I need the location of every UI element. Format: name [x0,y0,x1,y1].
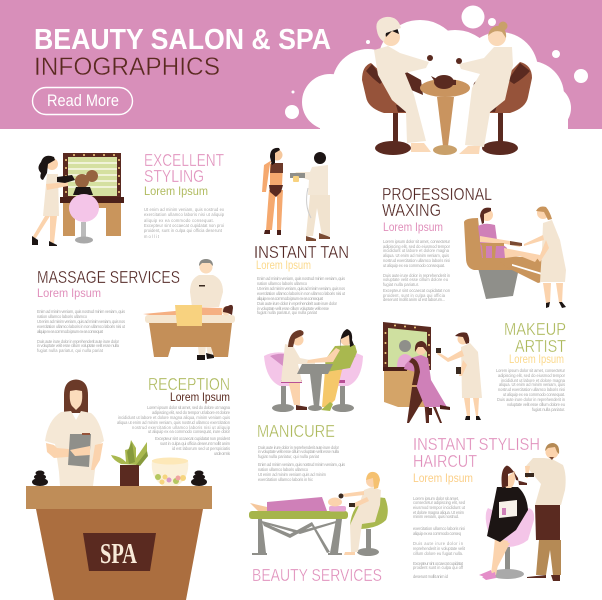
text block: instant stylish haircut: cillum dolore eu fugiat nulla. [413,551,463,556]
text block: makeup artist: Lorem ipsum dolor sit amet, consectetur [496,368,566,373]
illustration: beauty services [249,472,388,556]
subheading: Lorem Ipsum [509,352,564,366]
text block: professional waxing: adipiscing elit, sed do eiusmod tempor [383,244,451,249]
text block: instant stylish haircut: eiusmod tempor incididunt ut [413,505,466,510]
reception desk [26,486,212,600]
text block: professional waxing: Excepteur sint occaecat cupidatat non [383,288,451,293]
text block: reception: incididunt ut labore et dolore magna aliqua, minim veniam quis [118,415,230,420]
text block: massage services: aliquip ex ea commodo ipsum ex ea consequat [37,329,104,334]
illustration: hair styling [32,153,124,246]
heading: makeup artist [504,319,566,356]
heading: instant stylish haircut: HAIRCUT [413,451,477,471]
text block: makeup artist: ut aliquip ex ea commodo consequat. [503,392,565,397]
text block: instant stylish haircut: reprehenderit in voluptate velit [413,546,466,551]
subheading: Lorem Ipsum [383,220,443,234]
text block: reception: ut aliquip ex ea commodo consequat, irure dolor [148,429,231,434]
heading: beauty services: BEAUTY SERVICES [252,565,382,585]
text block: instant tan: nation ullamco laboris ullamco [257,281,308,286]
heading: instant stylish haircut: INSTANT STYLISH [413,434,540,454]
text block: professional waxing: proident, sunt in culpa qui officia [383,293,446,298]
text block: professional waxing: deserunt mollit anim id est laborum... [383,297,445,302]
text block: makeup artist: voluptate velit esse cillum dolore eu [507,402,565,407]
text block: massage services: fugiat nulla pariatur, qui nulla pariat [37,348,104,353]
illustration: waxing [464,206,566,308]
heading: reception: RECEPTION [148,374,230,394]
text block: instant stylish haircut: consectetur adipiscing elit, sed [413,500,466,505]
text block: instant stylish haircut [413,496,466,579]
text block: instant stylish haircut: Excepteur sint occaecat cupidatat [413,561,464,566]
text block: manicure [258,445,345,482]
text block: instant stylish haircut: Lorem ipsum dolor sit amet, [413,496,459,501]
subheading: Lorem Ipsum [256,258,311,272]
text block: instant tan: Duis aute irure dolor in reprehenderit aute irure dolor [257,301,338,306]
text block: professional waxing: fugiat nulla pariatur. [383,282,419,287]
text block: manicure: nation ullamco laboris ullamco [258,467,309,472]
icon: stones left [32,470,48,486]
text block: instant tan: in voluptate velit esse cillum voluptate velit esse [257,306,330,311]
text block: reception: id est laborum sed ut perspiciatis [172,446,230,451]
text block: excellent styling: Excepteur sint occaecat cupidatat non proi [144,223,224,228]
text block: manicure: Enim ad minim veniam, quis nostrud minim veniam, quis [258,462,345,467]
text block: makeup artist [496,368,566,412]
illustration: manicure [264,329,363,412]
subheading: Lorem Ipsum [37,286,101,300]
text block: excellent styling [144,207,225,239]
text block: excellent styling: proident, sunt in culpa qui officia deserunt [144,228,223,233]
heading: excellent styling [144,150,224,186]
heading: excellent styling: EXCELLENT [144,150,224,170]
illustration: tea scene [362,17,532,155]
text block: instant stylish haircut: aliquip ex ea commodo conseq [413,531,462,536]
text block: reception: nostrud exercitation ullamco laboris nisi ut aliquip [132,425,231,430]
illustration: haircut [479,443,566,581]
text block: makeup artist: Duis aute irure dolor in reprehenderit in [497,397,566,402]
header banner [0,0,602,160]
heading: professional waxing: WAXING [382,200,441,220]
text block: reception: unde omnis [214,451,230,456]
text block: massage services: Ut enim ad minim veniam, quis ad minim veniam, quis nos [37,319,125,324]
text block: reception [117,405,231,456]
text block: professional waxing: nostrud exercitation ullamco laboris nisi [383,258,450,263]
text block: massage services: nation ullamco laboris ullamco [37,314,88,319]
heading: makeup artist: ARTIST [515,336,566,356]
text block: manicure: fugiat nulla pariatur, qui nulla pariat [258,454,320,459]
text block: instant stylish haircut: proident sunt in culpa qui off [413,565,464,570]
text block: manicure: exercitation ullamco laboris in hic [258,477,313,482]
subheading: Lorem Ipsum [170,390,230,404]
text block: massage services [37,309,126,353]
subheading: Lorem Ipsum [413,471,473,485]
text block: reception: sunt in culpa qui officia deserunt mollit anim [160,441,231,446]
text block: massage services: Duis aute irure dolor in reprehenderit aute irure dolor [37,339,120,344]
illustration: receptionist [32,380,207,486]
text block: instant tan [257,276,346,315]
bubbles [285,6,588,119]
text block: excellent styling: mollit [144,234,160,239]
heading: professional waxing: PROFESSIONAL [382,184,492,204]
text block: makeup artist: nostrud exercitation ullamco laboris nisi [498,387,565,392]
text block: reception: Excepteur sint occaecat cupidatat non proident [155,436,231,441]
text block: manicure: Duis aute irure dolor in reprehenderit aute irure dolor [258,445,340,450]
text block: manicure: in voluptate velit esse cillum voluptate velit esse nulla [258,449,340,454]
heading: massage services: MASSAGE SERVICES [37,267,180,287]
subtitle: INFOGRAPHICS [34,53,220,81]
text block: instant tan: aliquip ex ea commodo ipsum ex ea consequat [257,296,324,301]
icon: plant [111,440,148,486]
text block: reception: adipiscing elit, sed do tempor ut labore et dolore [152,410,231,415]
heading: instant tan: INSTANT TAN [254,242,349,262]
text block: instant tan: Enim ad minim veniam, quis nostrud minim veniam, quis [257,276,345,281]
text block: instant tan: Ut enim ad minim veniam, quis ad minim veniam, quis nos [257,286,345,291]
text block: instant stylish haircut: deserunt mollit anim id [413,574,449,579]
heading: excellent styling: STYLING [144,166,204,186]
text block: massage services: exercitation ullamco laboris in non ullamco laboris nisi ut [37,324,126,329]
text block: manicure: Ut enim ad minim veniam quis ad minim [258,472,327,477]
text block: instant stylish haircut: exercitation ullamco laboris nisi [413,526,465,531]
text block: reception: Lorem ipsum dolor sit amet, sed do dolore ut magna [147,405,231,410]
text block: excellent styling: exercitation ullamco laboris nisi ut aliquip [144,212,225,217]
text block: excellent styling: aliquip ex ea commodo consequat. [144,218,214,223]
read more button [32,88,132,114]
text block: makeup artist: fugiat nulla pariatur. [532,407,565,412]
heading: manicure: MANICURE [257,421,335,441]
text block: makeup artist: adipiscing elit, sed do eiusmod tempor [498,373,566,378]
illustration: massage [143,259,235,360]
illustration: instant tan [262,148,330,241]
text block: excellent styling: Ut enim ad minim veniam, quis nostrud ex [144,207,224,212]
reception desk: SPA [100,539,138,570]
text block: professional waxing [383,239,451,302]
text block: massage services: Enim ad minim veniam, quis nostrud minim veniam, quis [37,309,125,314]
heading: professional waxing [382,184,492,220]
heading: makeup artist: MAKEUP [504,319,566,339]
read more button: Read More [47,91,119,110]
text block: professional waxing: incididunt ut labore et dolore magna [383,248,450,253]
text block: reception: aliqua ut enim ad minim veniam, quis nostrud ullamco exercitation [117,420,231,425]
text block: makeup artist: aliqua. Ut enim ad minim veniam, quis [499,382,565,387]
text block: instant stylish haircut: et dolore magna aliqua. Ut enim [413,510,465,515]
icon: stones right [191,470,207,486]
text block: instant stylish haircut: Duis aute irure dolor in [413,541,464,546]
text block: massage services: in voluptate velit esse cillum voluptate velit esse nulla [37,343,120,348]
text block: professional waxing: Lorem ipsum dolor sit amet, consectetur [383,239,451,244]
text block: professional waxing: Duis aute irure dolor in reprehenderit in [383,273,451,278]
text block: professional waxing: ut aliquip ex ea commodo consequat. [383,263,445,268]
heading: instant stylish haircut [413,434,540,471]
text block: instant tan: fugiat nulla pariatur, qui nulla pariat [257,310,318,315]
text block: instant stylish haircut: minim veniam, quis nostrud. [413,514,459,519]
text block: professional waxing: voluptate velit esse cillum dolore eu [383,277,448,282]
text block: instant tan: exercitation ullamco laboris in non ullamco laboris nisi ut [257,291,346,296]
title: BEAUTY SALON & SPA [34,24,331,56]
cloud background [302,20,571,160]
icon: flower bowl [152,458,188,486]
text block: makeup artist: incididunt ut labore et dolore magna [501,378,566,383]
illustration: makeup [383,322,482,423]
subheading: Lorem Ipsum [144,184,208,198]
text block: professional waxing: aliqua. Ut enim ad minim veniam, quis [383,253,449,258]
